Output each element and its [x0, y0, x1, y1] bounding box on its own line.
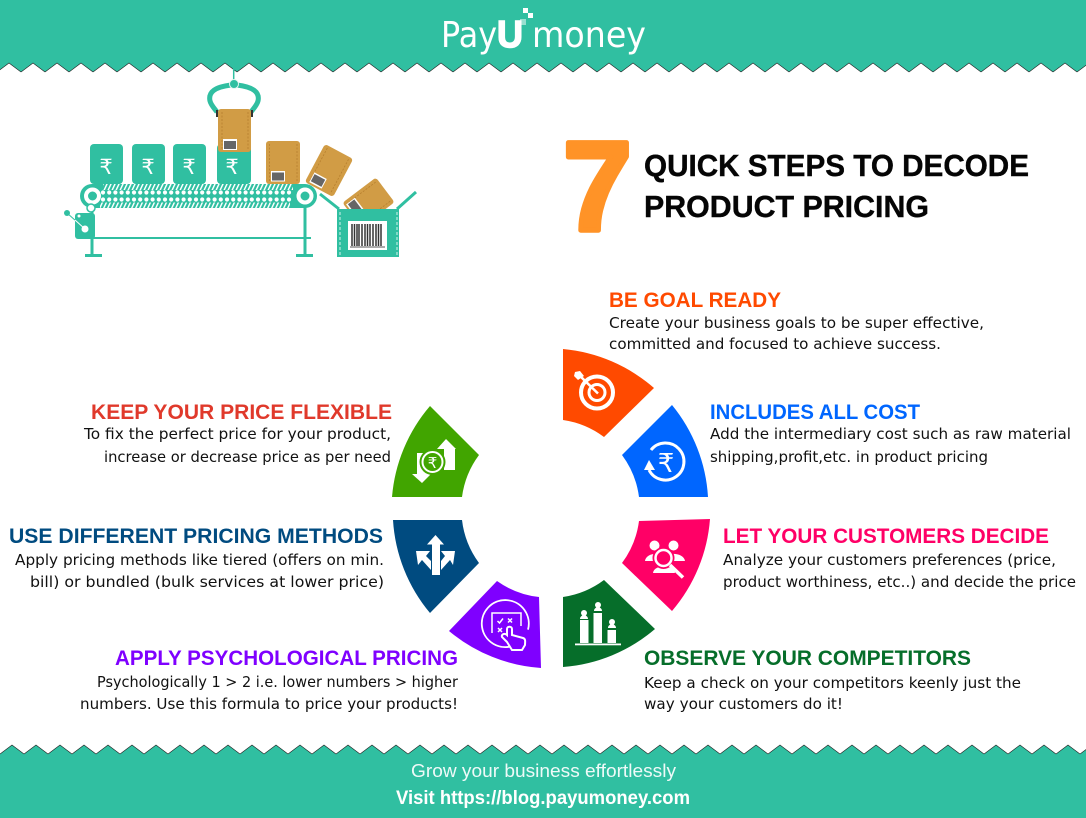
step: includes all cost: Add the intermediary cost such as raw material	[710, 425, 1071, 443]
step: includes all cost: INCLUDES ALL COST	[710, 400, 920, 424]
step: keep your price flexible	[83, 400, 392, 466]
belt	[80, 184, 317, 257]
step: observe your competitors: OBSERVE YOUR COMPETITORS	[644, 646, 971, 670]
icon: podium	[575, 602, 621, 645]
icon: customers and magnifier	[645, 540, 685, 578]
step: use different pricing methods	[9, 524, 384, 591]
step: keep your price flexible: KEEP YOUR PRICE FLEXIBLE	[91, 400, 392, 424]
logo: PayU money: Pay	[441, 15, 497, 56]
step: keep your price flexible: increase or decrease price as per need	[104, 448, 391, 466]
step: observe your competitors: Keep a check on your competitors keenly just the	[644, 674, 1021, 692]
logo: PayU money: money	[532, 15, 646, 56]
illustration: conveyor belt with packaging	[64, 63, 416, 257]
big number 7: 7	[563, 115, 632, 257]
header band	[0, 0, 1086, 73]
rupee boxes: ₹	[141, 155, 155, 179]
wheel segment: competitors (green)	[563, 580, 655, 667]
title: QUICK STEPS TO DECODE	[644, 148, 1029, 183]
step: be goal ready: committed and focused to achieve success.	[609, 335, 941, 353]
step: use different pricing methods: bill) or bundled (bulk services at lower price)	[30, 573, 384, 591]
rupee boxes: ₹	[182, 155, 196, 179]
wheel segment: psychological (purple)	[449, 581, 541, 668]
footer text: Visit https://blog.payumoney.com	[396, 787, 690, 809]
package going into carton	[342, 177, 395, 228]
footer text: Grow your business effortlessly	[411, 760, 677, 781]
step: use different pricing methods: USE DIFFERENT PRICING METHODS	[9, 524, 383, 548]
wheel segment: flexible (lime)	[392, 406, 479, 497]
title	[644, 148, 1029, 224]
step: let your customers decide: Analyze your customers preferences (price,	[723, 551, 1056, 569]
wheel segment: goal (orange)	[563, 349, 654, 437]
step: let your customers decide	[723, 524, 1076, 591]
claw	[210, 63, 258, 117]
rupee boxes: ₹	[225, 155, 239, 179]
icon: target	[574, 371, 613, 408]
step: includes all cost	[710, 400, 1071, 466]
wheel segment: methods (navy)	[393, 520, 479, 613]
motor	[64, 204, 95, 239]
logo: PayU money	[441, 8, 646, 56]
step: apply psychological pricing: Psychologically 1 > 2 i.e. lower numbers > higher	[97, 673, 459, 691]
icon: touch keypad	[482, 600, 529, 650]
footer band	[0, 744, 1086, 818]
package on belt	[266, 141, 300, 184]
wheel segment: cost (blue)	[622, 405, 708, 497]
wheel segment: customers (pink)	[622, 519, 710, 611]
step: apply psychological pricing: numbers. Use this formula to price your products!	[80, 695, 458, 713]
step: be goal ready	[609, 288, 984, 353]
step: be goal ready: Create your business goals to be super effective,	[609, 314, 984, 332]
step: apply psychological pricing	[80, 646, 459, 713]
step: includes all cost: shipping,profit,etc. in product pricing	[710, 448, 988, 466]
icon: three way arrows	[416, 535, 455, 575]
title: PRODUCT PRICING	[644, 189, 929, 224]
step: apply psychological pricing: APPLY PSYCHOLOGICAL PRICING	[115, 646, 458, 670]
step: use different pricing methods: Apply pricing methods like tiered (offers on min.	[15, 551, 384, 569]
icon: rupee with up and down arrows: ₹	[428, 454, 437, 472]
falling package	[305, 144, 353, 197]
step: observe your competitors: way your customers do it!	[644, 695, 843, 713]
rupee boxes: ₹	[99, 155, 113, 179]
step: let your customers decide: product worthiness, etc..) and decide the price	[723, 573, 1076, 591]
step: let your customers decide: LET YOUR CUSTOMERS DECIDE	[723, 524, 1049, 548]
rupee boxes	[90, 144, 251, 184]
carton box with barcode	[320, 192, 416, 257]
package in claw	[218, 109, 251, 152]
step: observe your competitors	[644, 646, 1021, 713]
footer text	[396, 760, 690, 809]
step: be goal ready: BE GOAL READY	[609, 288, 781, 312]
icon: rupee cycle: ₹	[658, 449, 674, 479]
logo: PayU money: U	[497, 14, 523, 56]
step: keep your price flexible: To fix the perfect price for your product,	[83, 425, 391, 443]
